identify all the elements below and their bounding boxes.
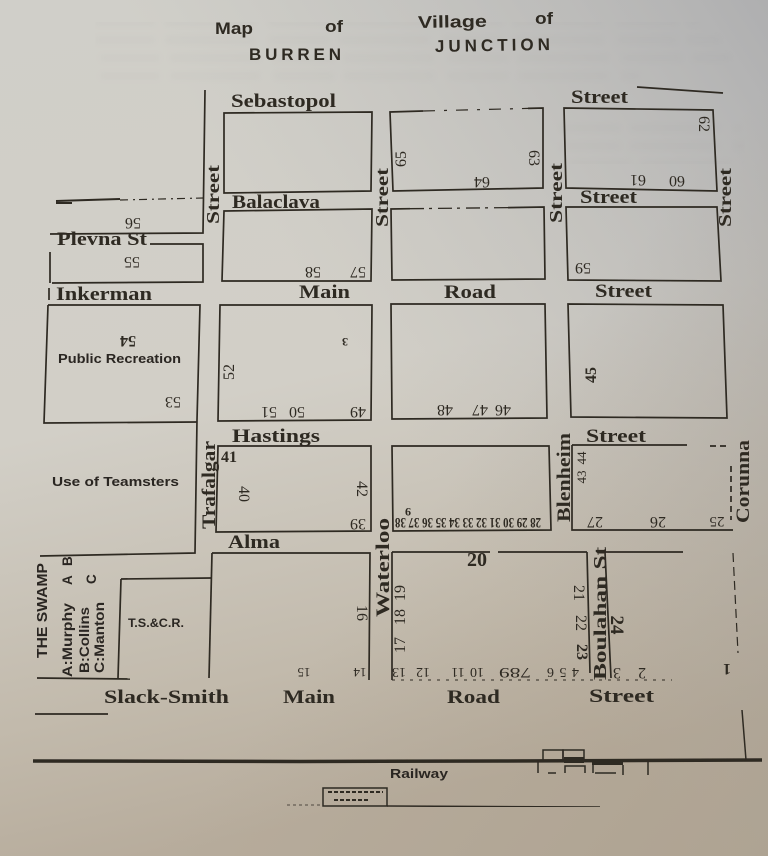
title: BURREN (249, 45, 341, 64)
lot numbers upside down: 56 (125, 214, 141, 231)
lot numbers upside down: 27 (587, 513, 603, 530)
street name: Road: Road (444, 283, 497, 303)
street name: Street second row: Street (580, 188, 638, 208)
lot numbers upside down: 3 (342, 335, 348, 349)
lot numbers sideways: 65 (393, 151, 410, 167)
street name: Street third row: Street (595, 282, 653, 302)
lot numbers upside down: 61 (630, 171, 646, 188)
lot numbers upside down: 9 (405, 505, 411, 519)
lot numbers upside down: 15 (298, 665, 310, 680)
title: Village (418, 12, 487, 32)
lot numbers sideways: 16 (353, 605, 370, 621)
title: of (325, 17, 343, 36)
lot numbers upside down: 55 (124, 253, 140, 270)
lot numbers sideways: 22 (572, 615, 589, 631)
lot numbers sideways: 62 (695, 116, 712, 132)
street name: Inkerman: Inkerman (56, 285, 153, 305)
western boundary lines (40, 87, 723, 556)
small siding building (287, 788, 600, 807)
lot numbers upside down: 789 (499, 664, 531, 680)
lot numbers sideways: 63 (525, 150, 542, 166)
the swamp legend: THE SWAMP (34, 563, 51, 658)
street name: Slack-Smith: Slack-Smith (104, 688, 230, 708)
title: of (535, 9, 553, 28)
street name: Plevna St: Plevna St (57, 230, 148, 250)
lot numbers upside down (120, 171, 731, 681)
lot numbers sideways: 40 (235, 486, 252, 502)
the swamp legend (34, 556, 107, 677)
vertical street names: Boulahan St (590, 547, 610, 680)
lot numbers upside down: 456 (547, 664, 579, 679)
area label: T.S.&C.R.: T.S.&C.R. (128, 616, 184, 630)
lot numbers upside down: 12 (416, 664, 430, 679)
lot numbers upside down: 13 (392, 664, 406, 679)
the swamp legend: B:Collins (77, 607, 92, 673)
vertical street names: Street (715, 168, 735, 227)
vertical street names: Trafalgar (200, 441, 220, 529)
street name: Street fourth row: Street (586, 427, 647, 447)
lot numbers sideways: 17 (392, 637, 409, 653)
lot numbers upside down: 54 (120, 332, 136, 349)
lot numbers sideways (221, 116, 712, 660)
lot numbers upside down: 3 (613, 664, 621, 681)
lot numbers upside down: 64 (474, 173, 490, 190)
lot numbers upside down: 60 (669, 172, 685, 189)
street name: Balaclava: Balaclava (232, 193, 320, 213)
the swamp legend: B (60, 556, 75, 566)
lot numbers upside down: 2 (638, 664, 646, 681)
lot numbers sideways: 19 (392, 585, 409, 601)
station buildings (538, 710, 746, 775)
lot numbers upside down: 25 (710, 513, 724, 529)
street name: Main lower: Main (283, 688, 336, 708)
lot number 41: 41 (221, 449, 237, 466)
vertical street names: Waterloo (374, 518, 394, 617)
lot numbers upside down: 1 (723, 660, 731, 677)
area label: Use of Teamsters: Use of Teamsters (52, 475, 179, 489)
street name: Road lower: Road (447, 688, 501, 708)
lot numbers sideways: 18 (392, 609, 409, 625)
the swamp legend: A (60, 575, 75, 585)
lot numbers upside down: 10 (470, 664, 484, 679)
area label: Railway: Railway (390, 767, 448, 781)
railway line (33, 760, 762, 762)
lot numbers sideways: 24 (606, 616, 627, 635)
lot number 20: 20 (467, 549, 487, 571)
street name: Sebastopol: Sebastopol (231, 92, 336, 112)
street name: Hastings: Hastings (232, 427, 320, 447)
lot numbers sideways: 52 (221, 364, 238, 380)
street name: Main: Main (299, 283, 351, 303)
lot numbers upside down: 48 (437, 401, 453, 418)
vertical street names (200, 163, 754, 680)
lot numbers upside down: 51 (261, 403, 277, 420)
town blocks (216, 108, 727, 532)
lot numbers upside down: 11 (451, 664, 465, 679)
vertical street names: Street (546, 163, 566, 223)
title: Map (215, 19, 253, 38)
lot numbers upside down: 57 (350, 263, 366, 280)
the swamp legend: A:Murphy (60, 602, 75, 677)
lot numbers upside down: 59 (575, 259, 591, 276)
lot numbers upside down: 53 (165, 393, 181, 410)
street name: Street top: Street (571, 88, 629, 108)
southern blocks and streets (35, 445, 738, 714)
the swamp legend: C:Manton (92, 602, 107, 673)
lot numbers upside down: 49 (350, 403, 366, 420)
area label: Public Recreation: Public Recreation (58, 352, 181, 366)
lot numbers upside down: 14 (353, 665, 366, 680)
lot numbers sideways: 42 (353, 481, 370, 497)
lot numbers upside down: 28 29 30 31 32 33 34 35 36 37 38 (395, 514, 541, 530)
lot numbers sideways: 21 (570, 585, 587, 601)
the swamp legend: C (84, 574, 99, 584)
vertical street names: Street (203, 165, 223, 224)
lot numbers sideways: 44 (574, 451, 589, 464)
lot numbers sideways: 43 (574, 470, 589, 484)
lot numbers sideways: 45 (583, 367, 600, 383)
vertical street names: Street (372, 168, 392, 227)
lot numbers upside down: 26 (650, 513, 666, 530)
vertical street names: Corunna (734, 440, 754, 523)
lot numbers upside down: 46 (495, 401, 511, 418)
lot numbers upside down: 50 (289, 403, 305, 420)
lot numbers sideways: 23 (573, 644, 590, 660)
lot numbers upside down: 39 (350, 515, 366, 532)
title: JUNCTION (435, 35, 550, 56)
street name: Alma: Alma (228, 533, 280, 553)
lot numbers upside down: 47 (472, 401, 488, 418)
title (215, 9, 553, 64)
street name: Street lower: Street (589, 687, 655, 707)
lot numbers upside down: 58 (305, 263, 321, 280)
vertical street names: Blenheim (555, 432, 575, 522)
